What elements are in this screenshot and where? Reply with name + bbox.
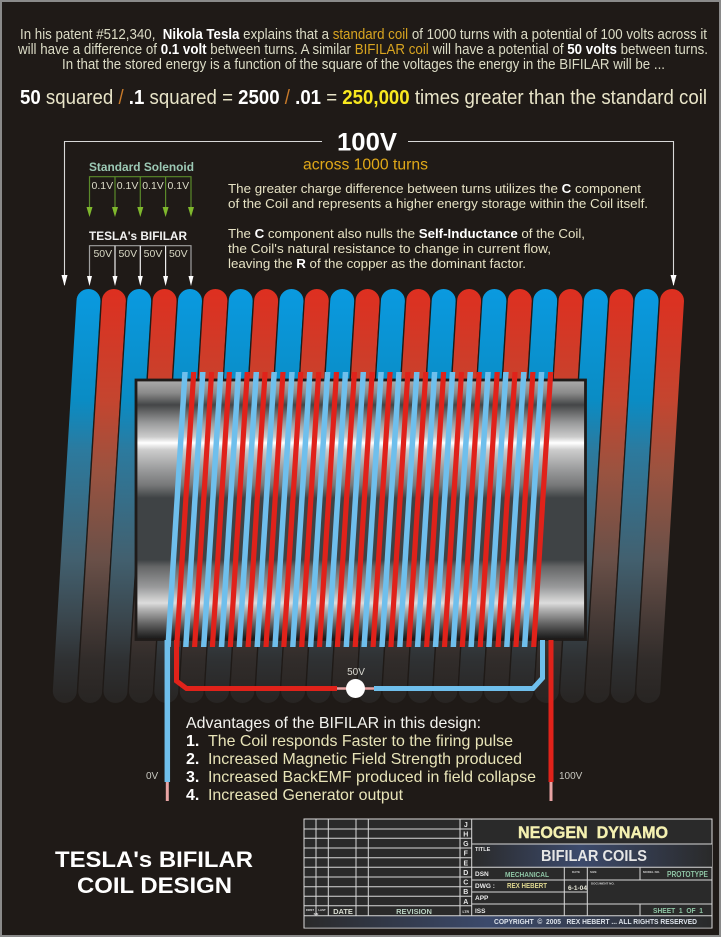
drawing title block: SIZE xyxy=(590,870,597,874)
drawing title block: A xyxy=(463,899,468,906)
main title: COIL DESIGN xyxy=(77,873,232,898)
drawing title block: B xyxy=(463,889,468,896)
explanation text: The C component also nulls the Self-Inductance of the Coil, xyxy=(228,227,585,241)
drawing title block: NEOGEN DYNAMO xyxy=(518,824,668,842)
Tesla's bifilar diagram: 50V xyxy=(118,248,137,260)
drawing title block: F xyxy=(464,850,469,858)
center tap node xyxy=(346,679,365,698)
leads from the inner bifilar windings xyxy=(167,640,551,801)
0V label: 0V xyxy=(146,771,159,782)
standard solenoid diagram xyxy=(86,162,194,217)
drawing title block: PROTOTYPE xyxy=(667,870,709,879)
intro paragraph: In his patent #512,340, Nikola Tesla explains that a standard coil of 1000 turns with a potential of 100 volts across it xyxy=(20,27,707,43)
voltage span bracket with arrows xyxy=(62,142,676,286)
advantages list: Increased Generator output xyxy=(208,787,404,804)
advantages list: 2. xyxy=(186,751,199,768)
Tesla's bifilar diagram: 50V xyxy=(144,248,162,260)
explanation text: leaving the R of the copper as the dominant factor. xyxy=(228,257,526,271)
outer coil windings xyxy=(52,288,685,704)
intro paragraph: In that the stored energy is a function of the square of the voltages the energy in the BIFILAR will be ... xyxy=(62,57,665,73)
drawing title block: G xyxy=(463,841,469,848)
explanation text xyxy=(228,182,648,271)
advantages list: Advantages of the BIFILAR in this design: xyxy=(186,715,481,732)
drawing title block: DWG : xyxy=(475,883,495,890)
drawing title block: COPYRIGHT © 2005 REX HEBERT ... ALL RIGHTS RESERVED xyxy=(494,917,698,926)
explanation text: The greater charge difference between turns utilizes the C component xyxy=(228,182,642,196)
Tesla's bifilar diagram: TESLA's BIFILAR xyxy=(89,229,187,243)
across 1000 turns: across 1000 turns xyxy=(303,156,428,174)
drawing title block: REX HEBERT xyxy=(507,881,547,890)
drawing title block: APP xyxy=(475,895,489,902)
100V lead label: 100V xyxy=(559,771,583,782)
100V heading: 100V xyxy=(337,128,397,156)
drawing title block: LAST xyxy=(318,908,326,912)
drawing title block: DATE xyxy=(333,907,353,916)
drawing title block: REVISION xyxy=(396,907,432,916)
advantages list xyxy=(186,715,536,804)
drawing title block: TITLE xyxy=(475,847,491,853)
main title: TESLA's BIFILAR xyxy=(55,847,253,872)
explanation text: the Coil's natural resistance to change in current flow, xyxy=(228,242,551,256)
advantages list: 1. xyxy=(186,733,199,750)
drawing title block: E xyxy=(463,860,468,868)
drawing title block: MECHANICAL xyxy=(505,870,549,879)
drawing title block: D xyxy=(463,870,468,877)
drawing title block: FIRST xyxy=(306,908,314,912)
standard solenoid diagram: 0.1V xyxy=(117,180,138,192)
drawing title block: BIFILAR COILS xyxy=(541,848,647,865)
advantages list: Increased Magnetic Field Strength produced xyxy=(208,751,522,768)
Tesla's bifilar diagram: 50V xyxy=(169,248,188,260)
advantages list: 3. xyxy=(186,769,199,786)
main title xyxy=(55,847,253,898)
drawing title block: ISS xyxy=(475,908,486,915)
drawing title block xyxy=(304,819,712,928)
explanation text: of the Coil and represents a higher energy storage within the Coil itself. xyxy=(228,197,648,211)
Tesla's bifilar diagram: 50V xyxy=(93,248,112,260)
inner bifilar windings xyxy=(165,372,553,647)
advantages list: Increased BackEMF produced in field collapse xyxy=(208,769,536,786)
energy formula: 50 squared / .1 squared = 2500 / .01 = 250,000 times greater than the standard coil xyxy=(20,87,707,109)
standard solenoid diagram: 0.1V xyxy=(91,180,113,192)
drawing title block: LTR xyxy=(463,910,470,914)
advantages list: The Coil responds Faster to the firing pulse xyxy=(208,733,513,750)
drawing title block: C xyxy=(463,880,468,886)
metal core cylinder xyxy=(136,380,586,640)
standard solenoid diagram: 0.1V xyxy=(167,180,189,192)
drawing title block: 6-1-04 xyxy=(568,885,587,892)
intro paragraph xyxy=(17,27,708,73)
drawing title block: S/N xyxy=(314,912,318,916)
standard solenoid diagram: Standard Solenoid xyxy=(89,162,194,174)
drawing title block: DOCUMENT NO. xyxy=(591,882,615,886)
drawing title block: H xyxy=(463,832,468,838)
advantages list: 4. xyxy=(186,787,199,804)
drawing title block: SHEET 1 OF 1 xyxy=(653,906,703,915)
drawing title block: MODEL NO. xyxy=(643,870,660,874)
Tesla's bifilar diagram xyxy=(87,229,194,286)
drawing title block: J xyxy=(464,822,468,829)
drawing title block: DSN xyxy=(475,871,489,878)
drawing title block: DATE xyxy=(572,870,580,874)
intro paragraph: will have a difference of 0.1 volt between turns. A similar BIFILAR coil will have a potential of 50 volts between turns. xyxy=(17,42,708,58)
standard solenoid diagram: 0.1V xyxy=(142,180,164,192)
50V label: 50V xyxy=(347,667,365,678)
